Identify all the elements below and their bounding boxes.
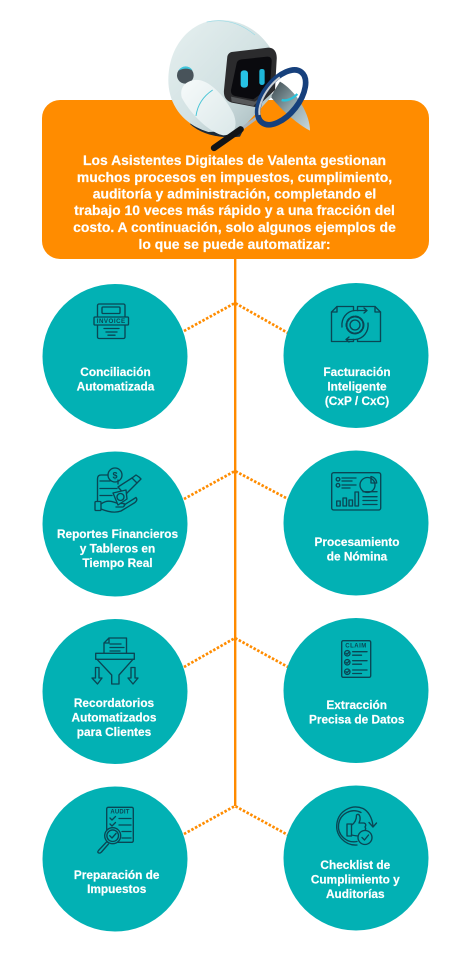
header text: muchos procesos en impuestos, cumplimiento, [77,169,392,185]
label [57,527,178,570]
label: de Nómina [327,550,388,564]
icon: invoice: INVOICE [97,318,126,325]
card: Recordatorios Automatizados [42,619,188,764]
label: Extracción [326,698,387,712]
central timeline line [234,259,236,806]
dotted connectors [184,303,288,835]
header text: Los Asistentes Digitales de Valenta gestionan [83,152,386,168]
label: Conciliación [80,365,151,379]
icon: dashboard [332,473,381,510]
label: Recordatorios [74,696,155,710]
label: Checklist de [320,858,391,872]
label: Tiempo Real [82,556,153,570]
label [77,365,155,394]
label: Inteligente [327,380,387,394]
header text [73,152,396,252]
label: Automatizados [72,710,157,724]
label [72,696,157,739]
icon: audit document with magnifier [98,807,133,853]
label [315,535,399,564]
label: para Clientes [77,725,152,739]
label: Auditorías [326,887,385,901]
header text: lo que se puede automatizar: [138,236,331,252]
label: Impuestos [87,882,147,896]
icon: audit document with magnifier: AUDIT [110,810,130,816]
header text: costo. A continuación, solo algunos ejemplos de [73,219,396,235]
header panel [42,100,429,259]
robot mascot with magnifying glass [168,20,315,148]
label: Procesamiento [315,535,399,549]
icon: claim form: CLAIM [345,644,367,650]
header text: trabajo 10 veces más rápido y a una fracción del [74,202,395,218]
label: Facturación [323,365,391,379]
label [74,868,160,896]
icon: funnel with documents [92,638,138,684]
label: Cumplimiento y [311,872,400,886]
card: Reportes Financieros [42,452,188,596]
card: Procesamiento de Nómina [284,450,428,596]
icon: report with money and hand [95,468,141,512]
label: (CxP / CxC) [325,394,389,408]
icon: thumbs up cycle [337,807,376,845]
card: Facturación Inteligente [284,283,428,428]
label: Automatizada [77,380,155,394]
label: Precisa de Datos [309,712,405,726]
card: Extracción Precisa de Datos [284,618,428,763]
icon: invoice [94,304,128,338]
label [311,858,400,901]
label [323,365,391,408]
icon: report with money and hand: $ [112,470,118,480]
card: Conciliación Automatizada [42,284,188,429]
label: Preparación de [74,868,160,882]
icon: claim form [342,641,371,677]
header text: auditoría y administración, completando el [93,186,376,202]
label: y Tableros en [80,542,155,556]
label [309,698,405,726]
label: Reportes Financieros [57,527,178,541]
card: Preparación de Impuestos [42,786,188,932]
icon: invoice processing gear [332,306,380,342]
card: Checklist de Cumplimiento [284,786,428,930]
